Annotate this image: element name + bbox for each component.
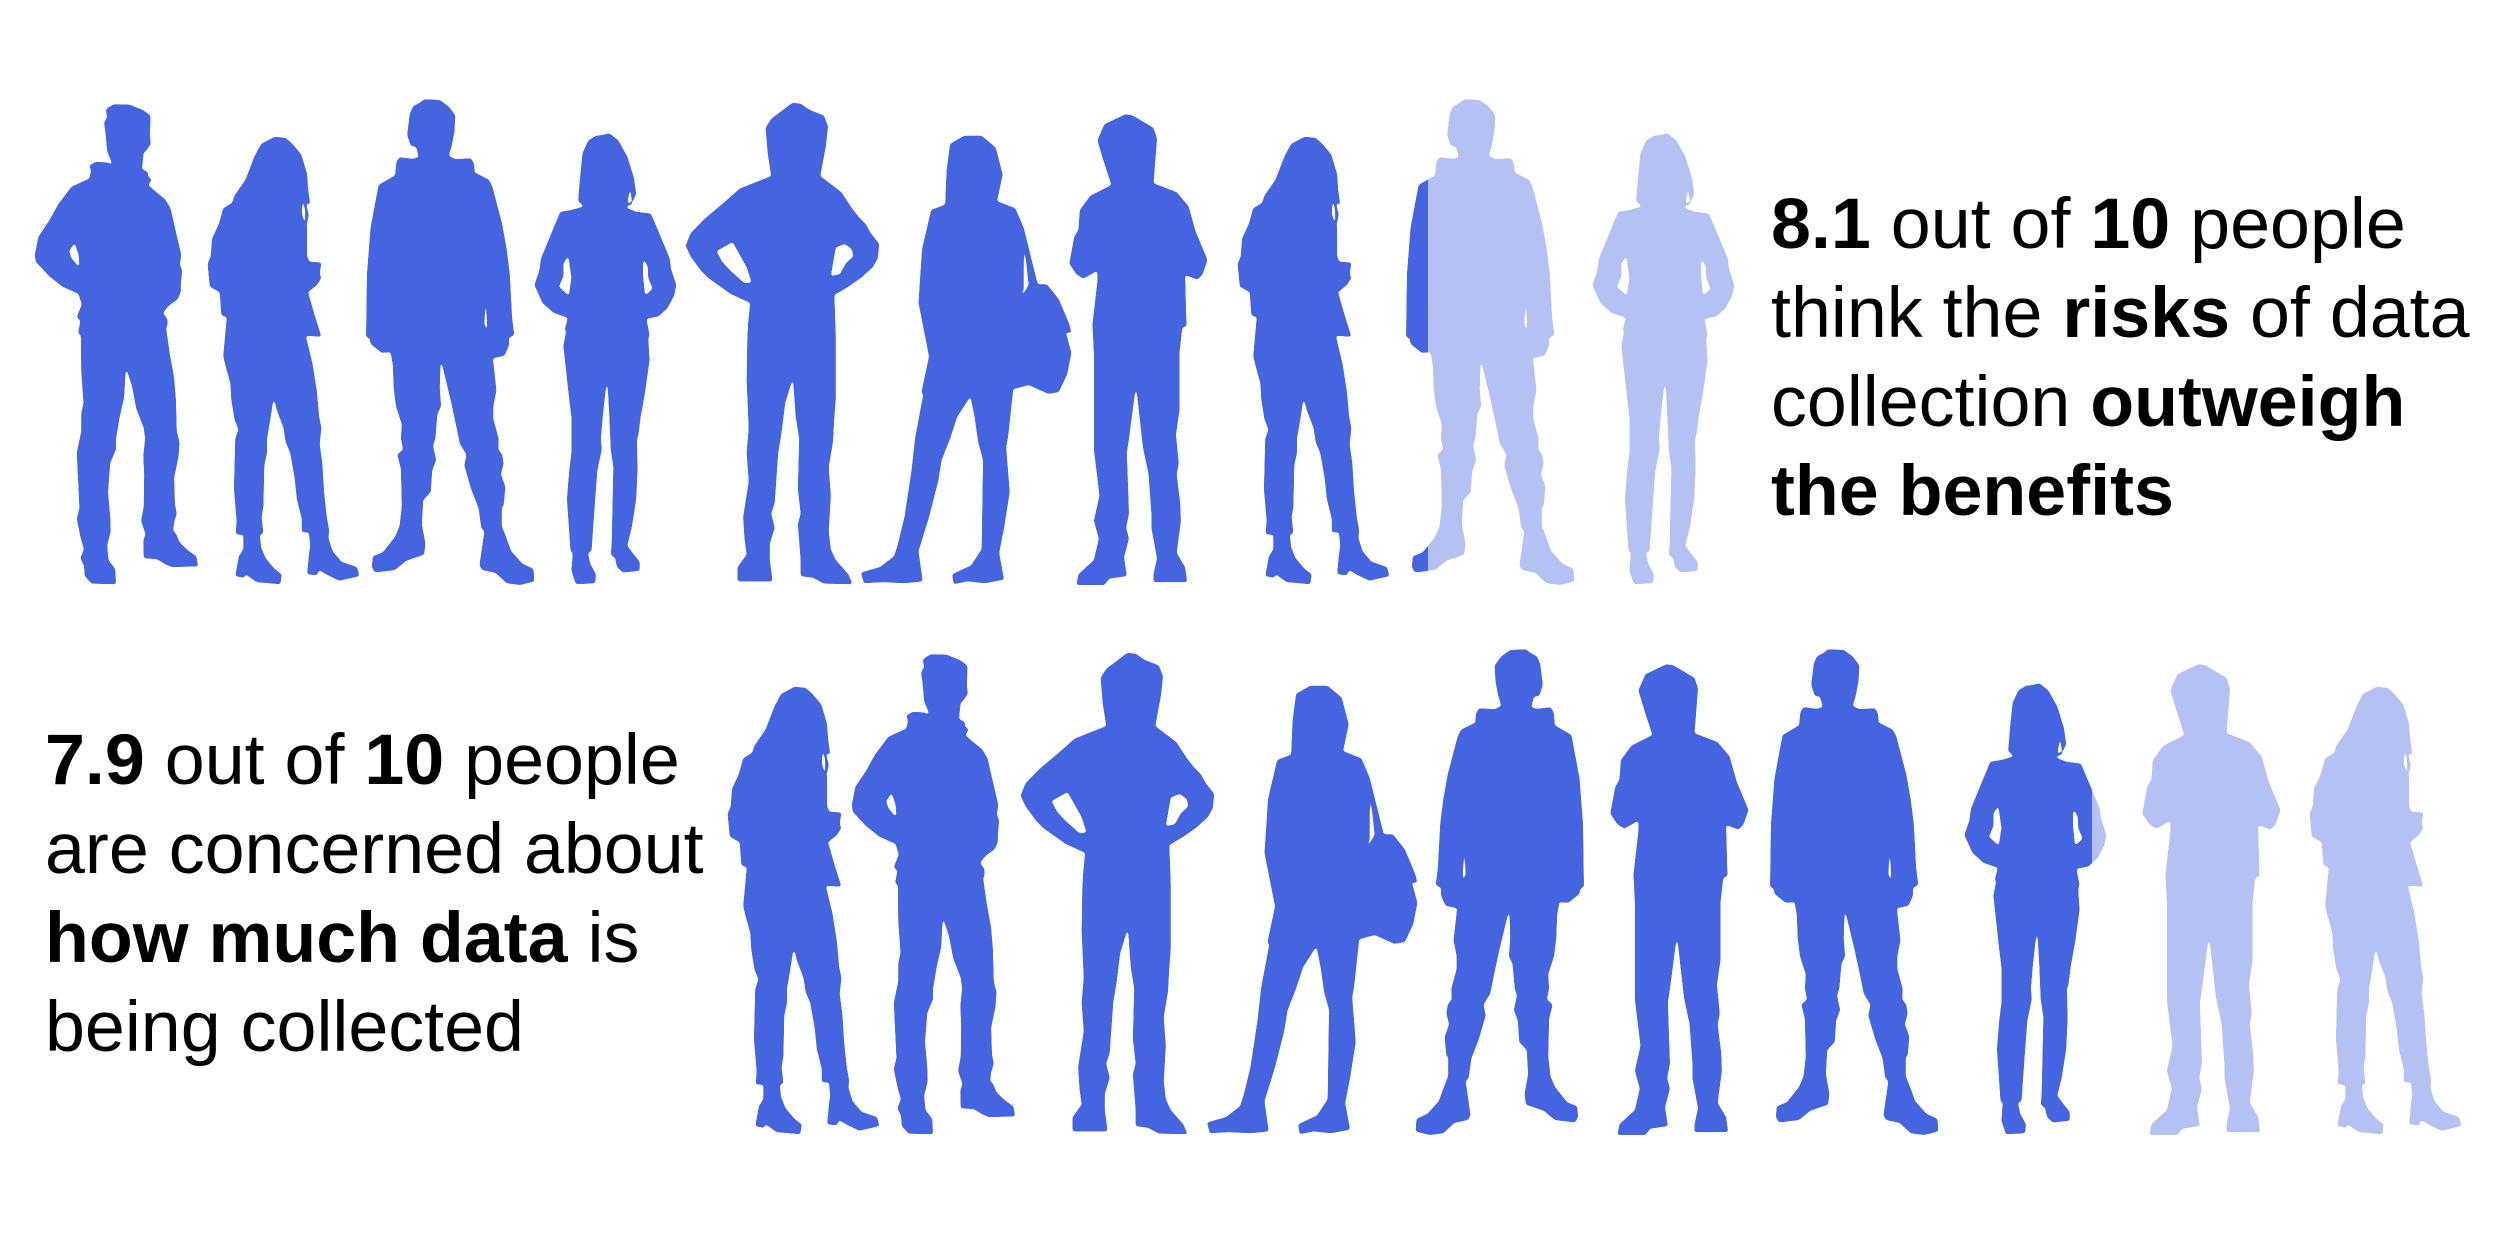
statement: 8.1 out of 10 xyxy=(1771,184,2470,531)
person 9: one tenth filled xyxy=(1406,99,1574,585)
person 7 xyxy=(1770,649,1938,1135)
person 1 xyxy=(728,687,879,1134)
statement: 8.1 out of 10: 8.1 out of 10 people xyxy=(1771,184,2406,264)
statement: 7.9 out of 10: how much data is xyxy=(45,898,639,978)
person 6 xyxy=(1610,664,1749,1135)
row 2: people pictogram, 7.9 of 10 xyxy=(728,649,2461,1135)
statement: 7.9 out of 10 xyxy=(45,720,704,1067)
statement: 8.1 out of 10: think the risks of data xyxy=(1771,273,2470,353)
person 4 xyxy=(1207,686,1417,1134)
person 5 xyxy=(686,103,879,584)
person 2 xyxy=(208,137,359,584)
person 10: unfilled xyxy=(1592,133,1734,584)
person 6 xyxy=(861,136,1071,584)
person 1 xyxy=(35,104,198,584)
person 2 xyxy=(852,654,1015,1134)
person 4 xyxy=(534,133,676,584)
statement: 7.9 out of 10: are concerned about xyxy=(45,809,704,889)
person 3 xyxy=(366,99,534,585)
statement: 7.9 out of 10: being collected xyxy=(45,987,524,1067)
statement: 8.1 out of 10: collection outweigh xyxy=(1771,362,2405,442)
row 1: people pictogram, 8.1 of 10 xyxy=(35,99,1734,585)
person 8: nine tenths filled xyxy=(1964,683,2106,1134)
person 10: unfilled xyxy=(2310,687,2461,1134)
person 5 (mirrored) xyxy=(1416,649,1584,1135)
statement: 7.9 out of 10: 7.9 out of 10 people xyxy=(45,720,680,800)
person 8 xyxy=(1238,137,1389,584)
statement: 8.1 out of 10: the benefits xyxy=(1771,451,2174,531)
person 7 xyxy=(1069,114,1208,585)
person 3 xyxy=(1021,653,1214,1134)
person 9: unfilled xyxy=(2142,664,2281,1135)
